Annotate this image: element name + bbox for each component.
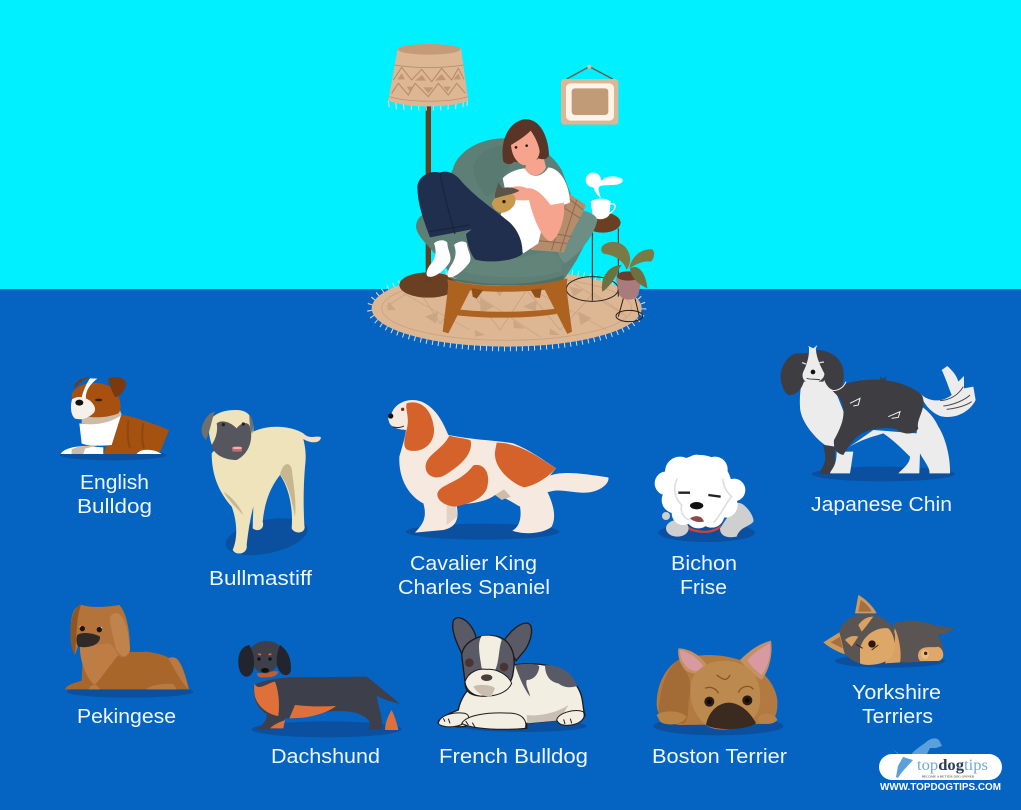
throw pillow (531, 193, 586, 252)
small dog held by woman (492, 183, 519, 213)
side table (566, 213, 621, 301)
label: English Bulldog: English (80, 471, 149, 494)
panel: English Bulldog (60, 377, 169, 518)
icon: dog hind leg (896, 757, 913, 778)
logo tagline: BECOME A BETTER DOG OWNER (922, 774, 975, 778)
armchair (416, 138, 597, 286)
illustration: woman with dog in armchair (371, 44, 654, 348)
label: Boston Terrier: Boston Terrier (652, 745, 787, 768)
label: Bichon Frise: Bichon (671, 552, 737, 575)
icon: Cavalier King Charles Spaniel (388, 400, 609, 540)
icon: Japanese Chin (781, 345, 976, 481)
icon: Bichon Frise (655, 455, 755, 542)
label: Bichon Frise: Frise (680, 576, 727, 599)
panel: Dachshund (238, 641, 402, 768)
label: Dachshund: Dachshund (271, 745, 380, 768)
panel: Pekingese (65, 604, 193, 728)
label: Yorkshire Terriers: Yorkshire (852, 681, 941, 704)
icon: French Bulldog (438, 618, 587, 732)
wall picture (561, 65, 618, 125)
rug (371, 269, 643, 348)
panel: Japanese Chin (781, 345, 976, 516)
label: Bullmastiff: Bullmastiff (209, 567, 312, 590)
label: English Bulldog: Bulldog (77, 495, 152, 518)
label: Pekingese: Pekingese (77, 705, 176, 728)
label: Japanese Chin: Japanese Chin (811, 493, 952, 516)
icon: Dachshund (238, 641, 402, 737)
logo wordmark: topdogtips (917, 757, 988, 774)
icon: Pekingese (65, 604, 193, 698)
label: French Bulldog: French Bulldog (439, 745, 588, 768)
icon: Bullmastiff (202, 410, 321, 562)
panel: Boston Terrier (652, 641, 787, 768)
icon: English Bulldog (60, 377, 169, 460)
icon: Boston Terrier (653, 641, 783, 735)
background: cyan wall (0, 0, 1021, 289)
logo: Top Dog Tips (879, 738, 1002, 793)
label: Yorkshire Terriers: Terriers (862, 705, 933, 728)
panel: Bullmastiff (202, 410, 321, 590)
background: blue floor (0, 289, 1021, 810)
woman (417, 119, 570, 277)
label: Cavalier King Charles Spaniel: Charles Spaniel (398, 576, 550, 599)
panel: Yorkshire Terriers (823, 595, 954, 728)
panel: French Bulldog (438, 618, 588, 768)
icon: leaping dog (893, 738, 942, 762)
icon: Yorkshire Terrier (823, 595, 954, 668)
panel: Bichon Frise (655, 455, 755, 599)
panel: Cavalier King Charles Spaniel (388, 400, 609, 599)
floor lamp (388, 44, 468, 298)
logo url: WWW.TOPDOGTIPS.COM (880, 782, 1001, 793)
label: Cavalier King Charles Spaniel: Cavalier King (410, 552, 537, 575)
chair legs (443, 278, 572, 334)
logo badge (879, 754, 1002, 780)
coffee cup and steam (586, 173, 623, 219)
potted plant (601, 242, 654, 322)
